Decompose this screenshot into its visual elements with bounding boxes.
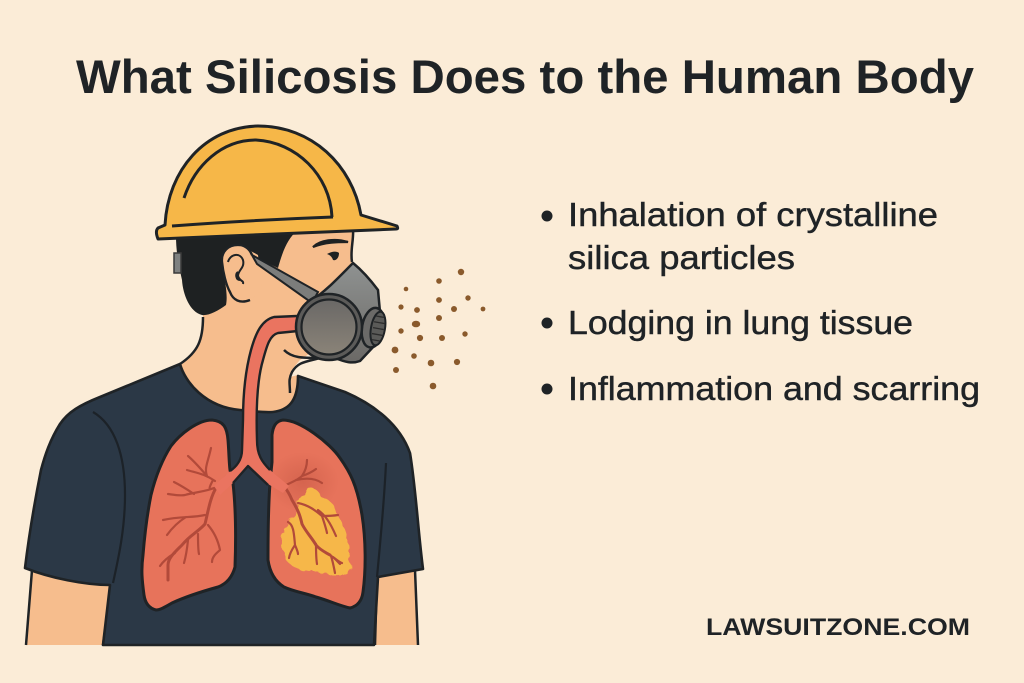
silicosis scarring patch [282, 488, 351, 576]
large filter [296, 294, 362, 360]
right bronchial tree [272, 460, 342, 573]
eyebrow and eye [313, 240, 348, 260]
trachea tube [214, 316, 298, 495]
strap clip [174, 253, 181, 273]
right lung [267, 420, 365, 608]
neck and face skin [178, 228, 354, 414]
sleeve seams [93, 412, 386, 583]
title: What Silicosis Does to the Human Body [76, 50, 974, 103]
illustration: worker with respirator and lungs [25, 126, 423, 645]
bullet 1 [542, 196, 938, 276]
bullet 1: Inhalation of crystalline [568, 196, 938, 233]
bullet 1: silica particles [568, 239, 795, 276]
hard hat [156, 126, 398, 239]
hair [176, 231, 297, 315]
bullet 3: Inflammation and scarring [568, 370, 980, 407]
t-shirt [25, 364, 423, 645]
neck and jaw lines [180, 228, 353, 393]
ear [222, 245, 262, 302]
respirator strap [252, 255, 318, 303]
bullet 2: Lodging in lung tissue [568, 304, 913, 341]
bullet list [542, 196, 980, 407]
footer brand: LAWSUITZONE.COM [706, 614, 970, 641]
mask body [305, 263, 380, 362]
right arm [375, 570, 418, 645]
left lung [142, 420, 236, 610]
left arm [26, 570, 112, 645]
small cartridge [359, 306, 388, 349]
dust particles [392, 269, 485, 389]
left bronchial tree [160, 448, 226, 580]
shaded lung area [267, 452, 339, 512]
respirator [296, 263, 388, 362]
